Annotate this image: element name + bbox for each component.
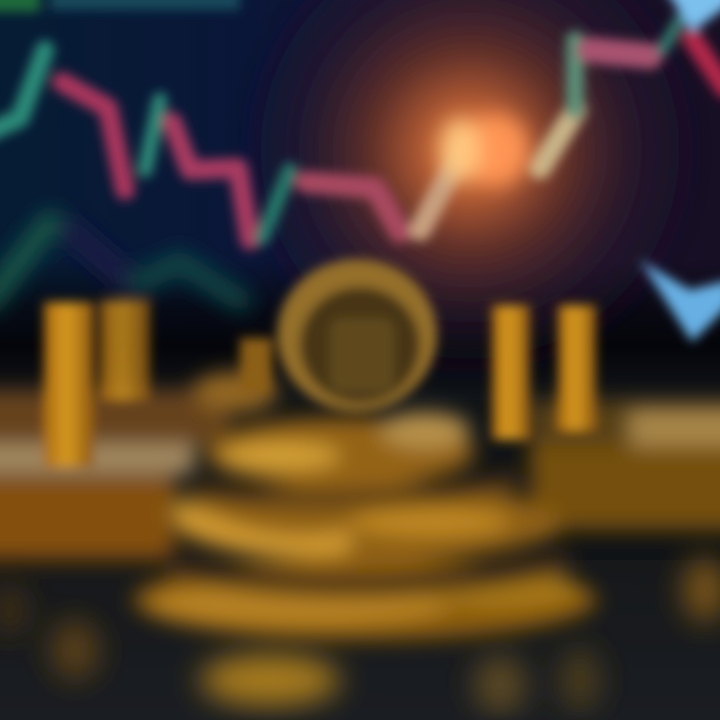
gold columns xyxy=(44,300,596,467)
blue arrows xyxy=(640,0,720,342)
lower chart line xyxy=(0,222,240,300)
center coin stacks xyxy=(133,372,597,640)
top-left green strip xyxy=(0,0,240,12)
glow core xyxy=(440,114,529,186)
main candlestick line xyxy=(0,20,720,240)
orange glow xyxy=(230,0,710,390)
reflections xyxy=(0,558,720,715)
central coin xyxy=(277,259,437,411)
gold stack base xyxy=(0,390,720,560)
